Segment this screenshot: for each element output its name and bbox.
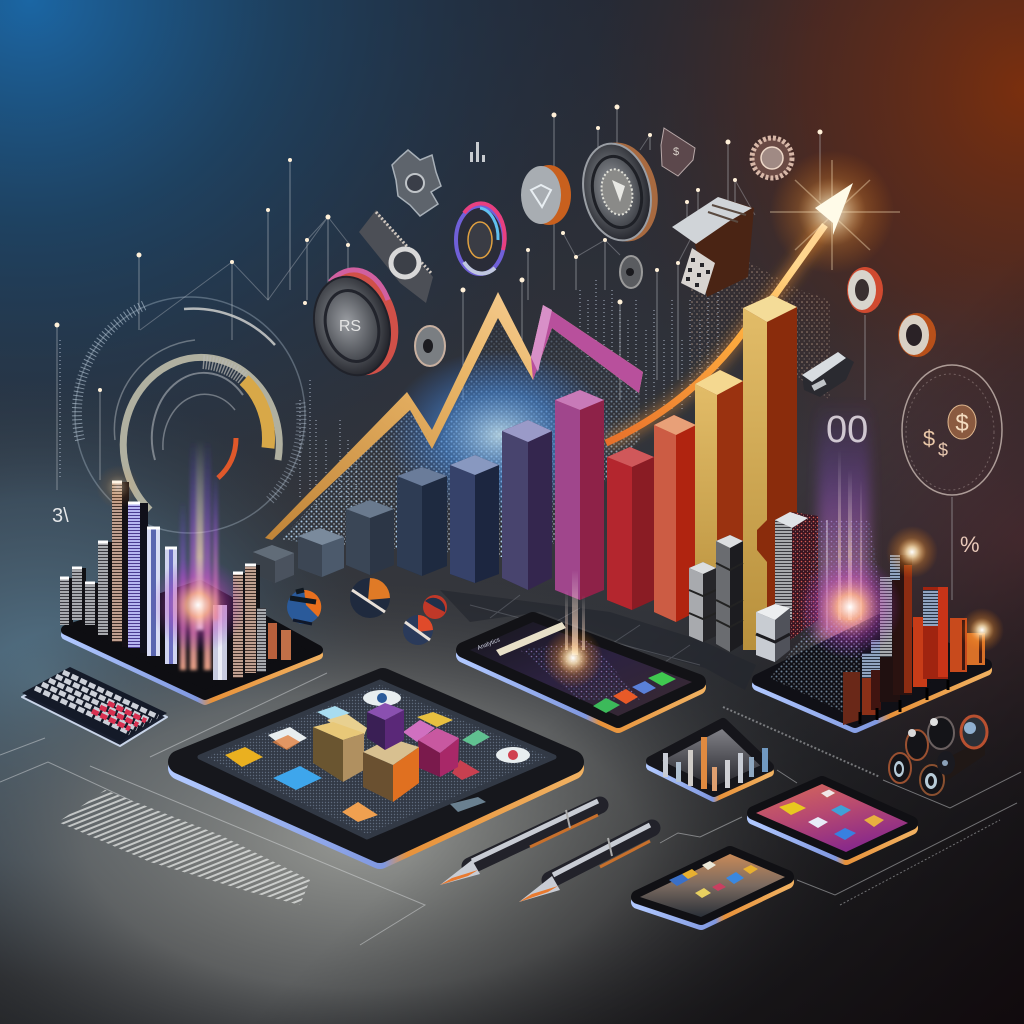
icon: dollar coins ring <box>902 365 1002 495</box>
beam: purple light column right <box>818 400 870 640</box>
icon: large pink-rim disc: RS <box>339 318 361 335</box>
right bars <box>843 555 985 725</box>
icon: ribbon with ring <box>359 210 433 303</box>
panel: bottom smartphone <box>638 853 787 923</box>
bar 10 <box>695 370 743 630</box>
floor guide lines <box>0 673 1021 945</box>
icon: rainbow ring <box>456 203 505 274</box>
icon: dollar coins ring: $ <box>938 440 948 460</box>
icon: large pink-rim disc <box>303 260 410 384</box>
bar 5 <box>450 455 499 583</box>
panel: right bar platform <box>758 520 1004 727</box>
icon: small disc <box>415 326 445 366</box>
bar 8 <box>607 447 654 610</box>
app icons on tablet <box>225 690 530 822</box>
3D cubes on tablet <box>313 703 459 802</box>
stacked grey blocks <box>689 512 818 662</box>
icon: gears and wheels <box>889 716 987 795</box>
icon: pens <box>440 801 652 902</box>
light beams left <box>96 440 246 670</box>
icon: dollar coins ring: $ <box>923 426 935 451</box>
icon: orange disc with diamond <box>521 165 571 225</box>
left bars <box>60 482 291 680</box>
panel: small chart tablet <box>651 723 769 797</box>
icon: gear badge <box>392 150 441 216</box>
bar 6 <box>502 420 552 590</box>
panel: left line text sheet <box>58 790 310 905</box>
bar chart: rising 3D bars <box>253 295 797 650</box>
bar 2 <box>298 528 344 577</box>
dotted particle field behind line <box>60 260 830 560</box>
bar 11 <box>743 295 797 650</box>
icon: floating balls <box>287 578 447 645</box>
line: zigzag trend <box>265 292 643 540</box>
icon: small hexagon tag: $ <box>673 146 679 158</box>
icon: red ring right <box>847 267 883 313</box>
icon: small ring <box>620 256 642 288</box>
bar 3 <box>346 500 394 575</box>
icon: dollar coins ring: $ <box>955 410 969 437</box>
icon: orange ring right <box>898 313 936 357</box>
glow: blue behind bars <box>385 350 615 520</box>
label: percent: % <box>960 532 980 557</box>
line: rising orange arrow <box>606 225 825 443</box>
panel: pink app tablet <box>754 783 911 858</box>
label: 3: 3\ <box>52 505 69 527</box>
arrow head with flare <box>770 150 900 274</box>
label: 00: 00 <box>826 409 868 451</box>
bar 9 <box>654 415 696 622</box>
bar 7 <box>555 390 604 600</box>
bar 4 <box>397 467 447 576</box>
bar 1 <box>253 545 294 583</box>
icon: concentric gauge rings <box>75 297 305 533</box>
icon: whistle block <box>802 352 854 397</box>
icon: keyboard <box>22 667 167 746</box>
icon: small bar glyph <box>470 142 485 162</box>
icon: arrow-shaped tool <box>672 197 754 297</box>
icon: small hexagon tag <box>661 128 695 176</box>
icon: spiked peach gear <box>752 138 792 178</box>
panel: central tablet <box>180 680 572 857</box>
tiled floor under bars <box>440 590 756 690</box>
panel: central smartphone <box>464 570 698 725</box>
panel: central smartphone: Analytics <box>477 637 501 652</box>
vertical pin lines <box>54 104 952 600</box>
icon: large silver disc <box>575 136 667 248</box>
panel: left bar platform <box>60 440 318 700</box>
